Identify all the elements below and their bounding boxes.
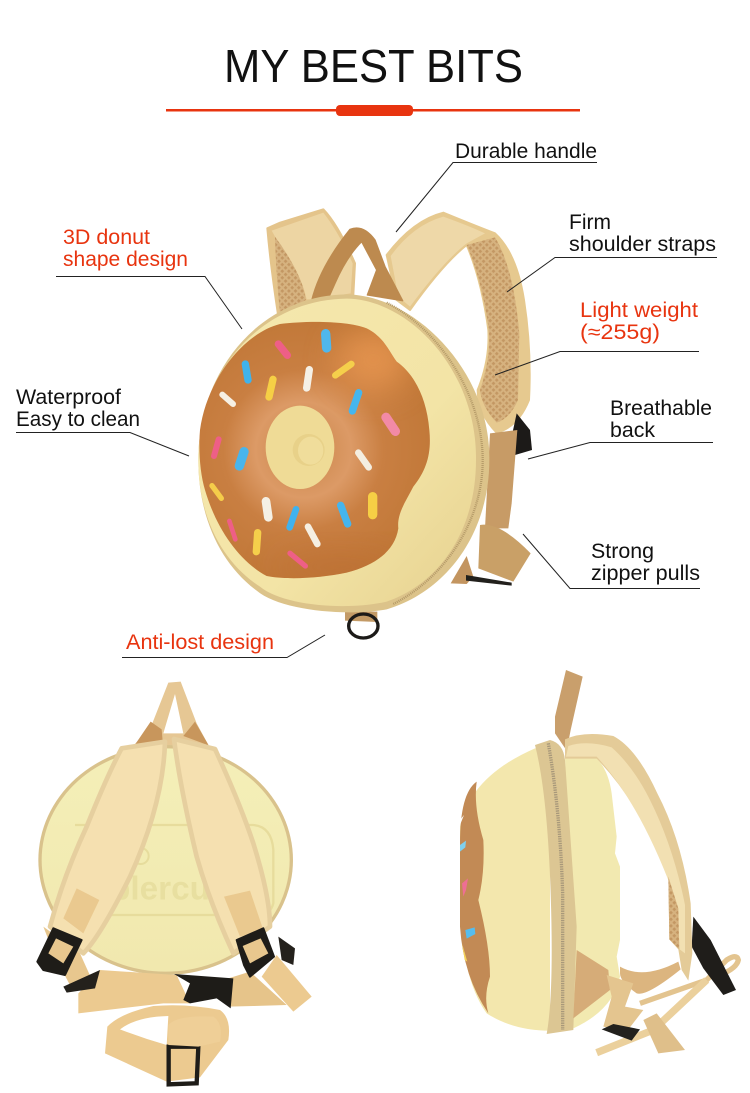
- label: Waterproof Easy to clean: Easy to clean: [16, 408, 140, 431]
- anti-lost loop strap: [105, 1005, 229, 1084]
- title divider: [166, 105, 580, 116]
- front shell side: [460, 745, 550, 1031]
- label: 3D donut shape design: [56, 226, 242, 329]
- zipper band: [535, 740, 577, 1034]
- shell rim and zipper: [198, 294, 489, 612]
- left back strap: [50, 742, 165, 953]
- label: Durable handle: [396, 140, 597, 232]
- label: Strong zipper pulls: Strong: [591, 540, 654, 563]
- label: Waterproof Easy to clean: [16, 386, 189, 456]
- top handle: [312, 228, 403, 301]
- label: Firm shoulder straps: shoulder straps: [569, 233, 716, 256]
- label: Anti-lost design: Anti-lost design: [126, 631, 274, 654]
- shoulder strap curve: [565, 734, 692, 981]
- back panel: [565, 758, 620, 1028]
- donut hole and button: [266, 406, 334, 489]
- label: Strong zipper pulls: [523, 534, 700, 588]
- label: 3D donut shape design: 3D donut: [63, 226, 150, 249]
- side webbing straps: [451, 430, 531, 586]
- left shoulder strap: [267, 209, 355, 317]
- embossed panel and logo: [75, 825, 273, 915]
- label: Anti-lost design: [122, 631, 325, 658]
- back handle: [135, 682, 209, 745]
- sprinkles: [212, 334, 395, 566]
- label: Light weight: Light weight: [580, 299, 698, 322]
- anti-lost D ring: [345, 612, 378, 638]
- side handle: [555, 670, 583, 751]
- label: Firm shoulder straps: Firm: [569, 211, 611, 234]
- label: Firm shoulder straps: [507, 211, 717, 292]
- label: Breathable back: Breathable: [610, 397, 712, 420]
- right back strap: [174, 739, 270, 953]
- lower straps behind: [597, 957, 738, 1053]
- side buckle: [692, 917, 736, 995]
- back buckle: [512, 413, 532, 456]
- embossed panel and logo: plercu: [110, 870, 210, 907]
- left strap buckle: [37, 928, 82, 975]
- lower webbing and chest buckle: [43, 927, 312, 1013]
- bottom tab and buckle: [573, 950, 643, 1041]
- label: Strong zipper pulls: zipper pulls: [591, 562, 700, 585]
- icing side: [460, 782, 490, 1013]
- label: Waterproof Easy to clean: Waterproof: [16, 386, 121, 409]
- label: Durable handle: Durable handle: [455, 140, 597, 163]
- label: Breathable back: [528, 397, 713, 459]
- right shoulder strap with mesh: [387, 213, 530, 433]
- front shell: [198, 299, 476, 606]
- label: Light weight: [495, 299, 699, 375]
- donut icing: [199, 322, 430, 580]
- side view of backpack: [460, 670, 738, 1053]
- zipper teeth: [387, 303, 483, 604]
- label: Breathable back: back: [610, 419, 656, 442]
- main product: donut backpack front view: [198, 209, 532, 638]
- title: MY BEST BITS: [224, 40, 523, 92]
- back shell: [38, 745, 293, 975]
- label: Light weight: (≈255g): [580, 321, 660, 344]
- back view of backpack: [37, 682, 312, 1084]
- right strap buckle: [237, 928, 274, 977]
- label: 3D donut shape design: shape design: [63, 248, 188, 271]
